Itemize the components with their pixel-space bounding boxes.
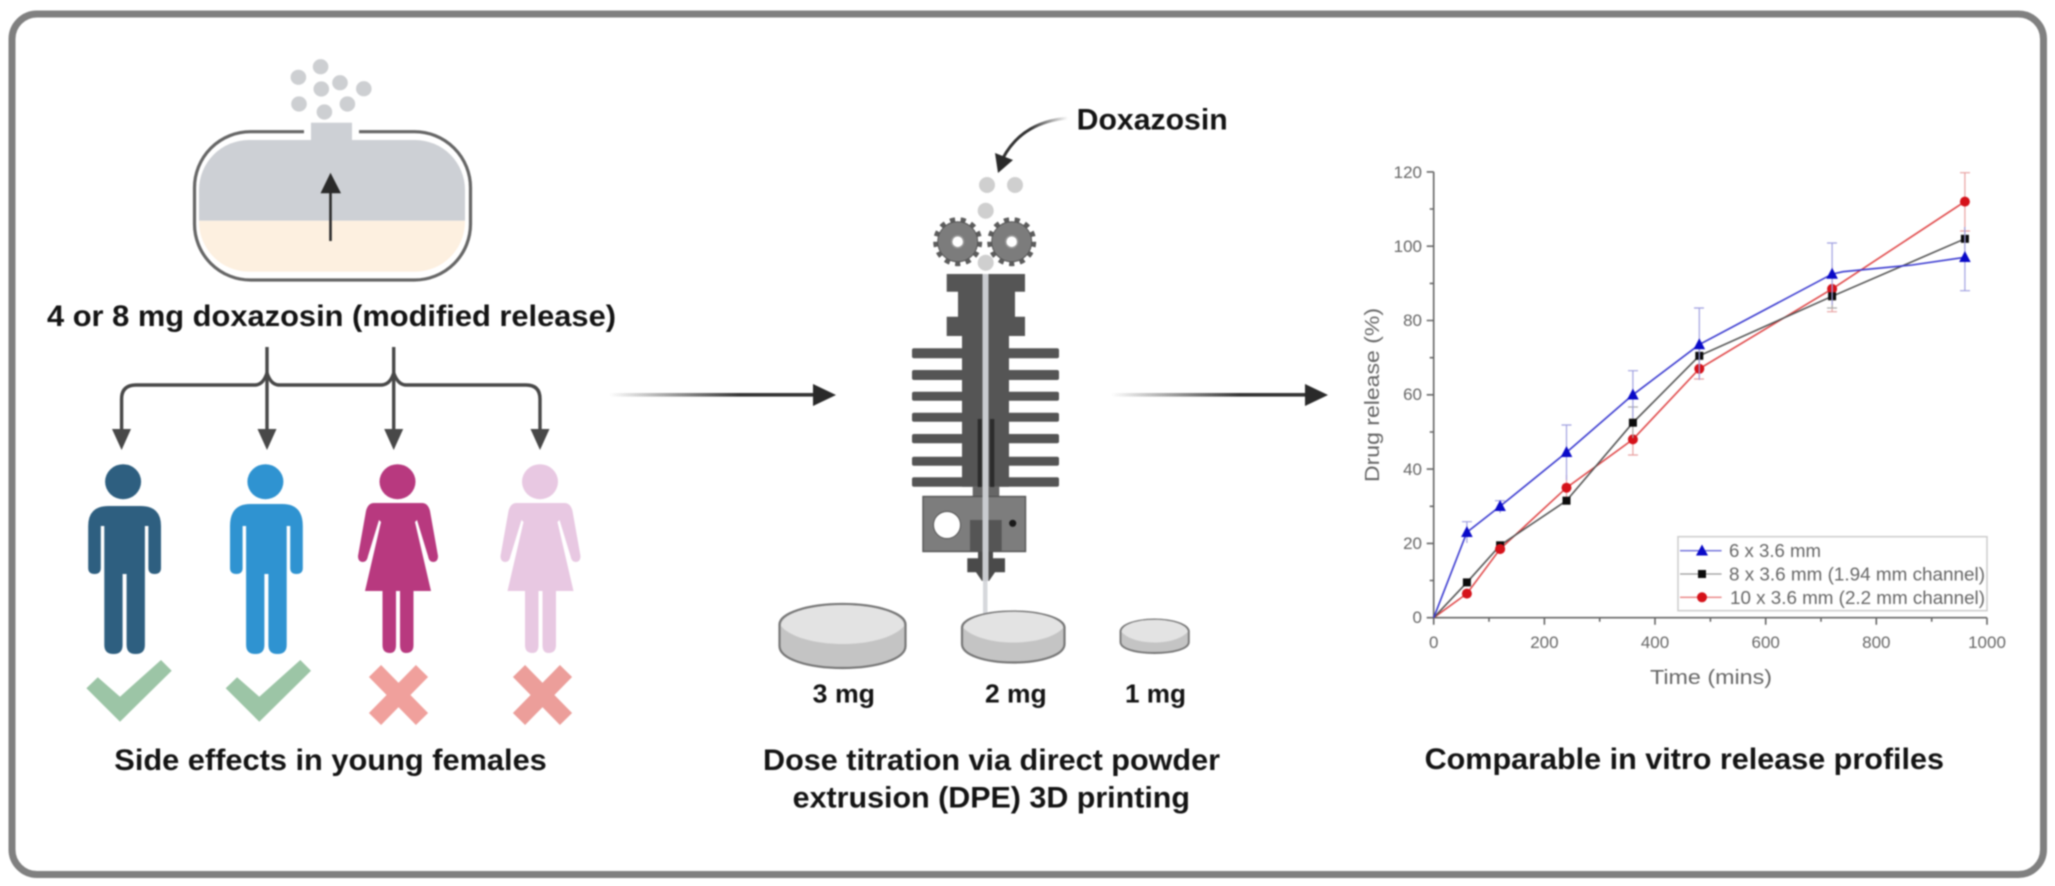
arrow: left panel to printer	[609, 384, 836, 406]
series: 10 x 3.6 mm red	[1434, 173, 1970, 618]
label: 1 mg: 1 mg	[1125, 679, 1186, 709]
x axis tick labels: 1000	[1968, 633, 2006, 652]
caption: dose titration	[763, 744, 1220, 814]
heat sink	[912, 274, 1059, 487]
panel: modified release tablet and side effects	[47, 59, 616, 777]
x axis tick labels: 800	[1862, 633, 1890, 652]
caption: release profiles: Comparable in vitro release profiles	[1425, 743, 1944, 776]
legend row: 8 x 3.6 mm: 8 x 3.6 mm (1.94 mm channel)	[1729, 564, 1985, 584]
heater block	[923, 496, 1026, 552]
legend row: 6 x 3.6 mm	[1680, 541, 1821, 561]
x axis tick labels: 400	[1641, 633, 1669, 652]
arrow: release direction	[320, 173, 341, 241]
extruded filament	[982, 274, 988, 581]
caption: side effects: Side effects in young females	[114, 744, 547, 777]
heading: dose: 4 or 8 mg doxazosin (modified release)	[47, 300, 616, 333]
panel: release profile chart	[1362, 163, 2006, 776]
x axis title: Time (mins)	[1650, 667, 1772, 689]
y axis tick labels: 80	[1403, 311, 1422, 330]
y axis tick labels: 60	[1403, 385, 1422, 404]
y axis title: Drug release (%)	[1362, 308, 1384, 482]
icon: 2 mg tablet	[962, 611, 1064, 662]
icon: check mark 1	[86, 660, 172, 722]
y axis tick labels	[1394, 163, 1422, 627]
icon: feed gear left	[936, 220, 979, 263]
icon: 1 mg tablet	[1120, 619, 1189, 653]
icon: male, dark blue	[88, 464, 161, 654]
icon: cross 1	[375, 671, 422, 719]
tablet shell	[194, 132, 470, 280]
x axis tick labels: 600	[1752, 633, 1780, 652]
y axis tick labels: 0	[1413, 608, 1422, 627]
label: 3 mg: 3 mg	[813, 679, 875, 709]
series: 8 x 3.6 mm black	[1434, 227, 1969, 618]
legend	[1678, 537, 1987, 611]
legend row: 6 x 3.6 mm: 6 x 3.6 mm	[1729, 541, 1821, 561]
caption: dose titration: Dose titration via direct powder	[763, 744, 1220, 777]
icon: male, light blue	[230, 464, 303, 654]
nozzle	[967, 552, 1005, 581]
panel: DPE 3D printing	[763, 103, 1228, 814]
arrow: bracket to patient groups	[112, 347, 550, 450]
caption: dose titration: extrusion (DPE) 3D printing	[793, 781, 1190, 814]
y axis tick labels: 100	[1394, 237, 1422, 256]
arrow: doxazosin feed	[995, 118, 1068, 173]
y axis tick labels: 20	[1403, 534, 1422, 553]
x axis tick labels	[1429, 633, 2006, 652]
chart axes	[1427, 172, 1987, 625]
icon: female, magenta	[358, 464, 438, 653]
icon: check mark 2	[226, 660, 311, 722]
icon: female, light pink	[500, 464, 580, 653]
icon: 3 mg tablet	[780, 604, 906, 668]
legend row: 10 x 3.6 mm: 10 x 3.6 mm (2.2 mm channel)	[1730, 588, 1985, 608]
x axis tick labels: 200	[1530, 633, 1559, 652]
series: 6 x 3.6 mm blue	[1434, 227, 1971, 618]
y axis tick labels: 120	[1394, 163, 1422, 182]
icon: feed gear right	[990, 220, 1033, 263]
arrow: printer to chart	[1111, 384, 1328, 406]
icon: extruder hot end	[912, 274, 1059, 614]
label: Doxazosin: Doxazosin	[1077, 103, 1228, 136]
released drug particles	[291, 59, 372, 120]
powder particles	[978, 177, 1023, 271]
y axis tick labels: 40	[1403, 460, 1422, 479]
label: 2 mg: 2 mg	[985, 679, 1047, 709]
icon: cross 2	[519, 671, 566, 719]
icon: tablet releasing drug	[194, 59, 470, 280]
x axis tick labels: 0	[1429, 633, 1438, 652]
